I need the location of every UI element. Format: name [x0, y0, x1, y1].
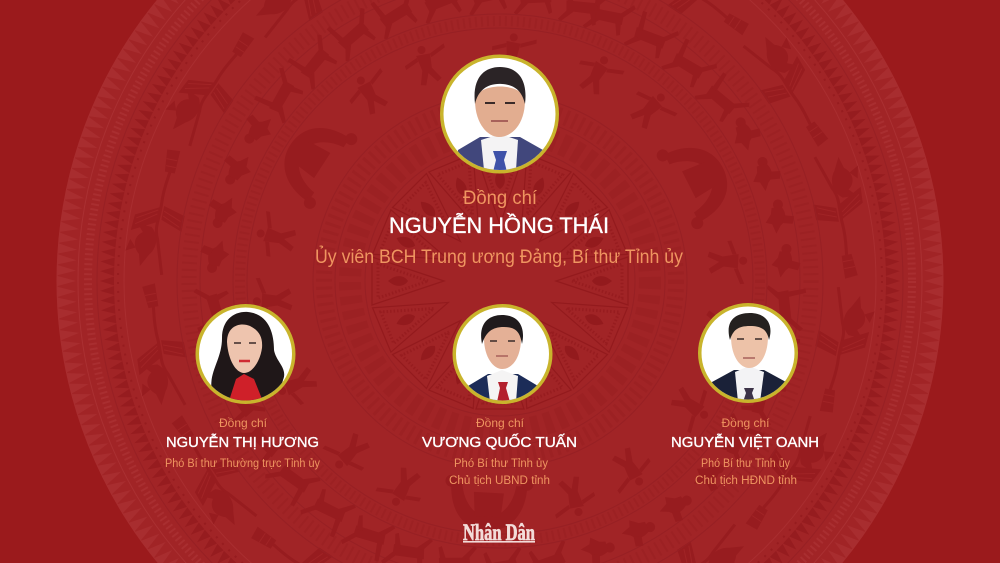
- logo: Nhân Dân: Nhân Dân: [463, 520, 535, 545]
- text: Vương Quốc Tuấn: [422, 416, 577, 487]
- role line 1: Vương Quốc Tuấn: Phó Bí thư Tỉnh ủy: [454, 458, 548, 470]
- name: Vương Quốc Tuấn: VƯƠNG QUỐC TUẤN: [422, 433, 577, 451]
- role: Nguyễn Thị Hương: Phó Bí thư Thường trực Tỉnh ủy: [165, 458, 320, 470]
- role: main official: Ủy viên BCH Trung ương Đảng, Bí thư Tỉnh ủy: [315, 246, 683, 268]
- label: Đồng chí: Đồng chí: [722, 416, 770, 430]
- portrait: Nguyễn Thị Hương: [196, 304, 296, 404]
- text: Nguyễn Thị Hương: [165, 416, 320, 470]
- portrait: Nguyễn Hồng Thái: [440, 54, 559, 180]
- name: Nguyễn Thị Hương: NGUYỄN THỊ HƯƠNG: [166, 434, 319, 451]
- role line 1: Nguyễn Việt Oanh: Phó Bí thư Tỉnh ủy: [701, 458, 790, 470]
- label: Đồng chí: Đồng chí: [219, 416, 268, 430]
- role line 2: Vương Quốc Tuấn: Chủ tịch UBND tỉnh: [449, 475, 550, 487]
- label: Đồng chí: Đồng chí: [476, 416, 525, 430]
- portrait: Nguyễn Việt Oanh: [698, 303, 798, 404]
- label: Đồng chí: Đồng chí: [463, 188, 538, 209]
- name: Nguyễn Hồng Thái: NGUYỄN HỒNG THÁI: [389, 212, 609, 238]
- text: Nguyễn Việt Oanh: [671, 416, 819, 487]
- name: Nguyễn Việt Oanh: NGUYỄN VIỆT OANH: [671, 434, 819, 451]
- role line 2: Nguyễn Việt Oanh: Chủ tịch HĐND tỉnh: [695, 475, 797, 487]
- portrait: Vương Quốc Tuấn: [452, 304, 552, 404]
- text: main official: [315, 188, 683, 268]
